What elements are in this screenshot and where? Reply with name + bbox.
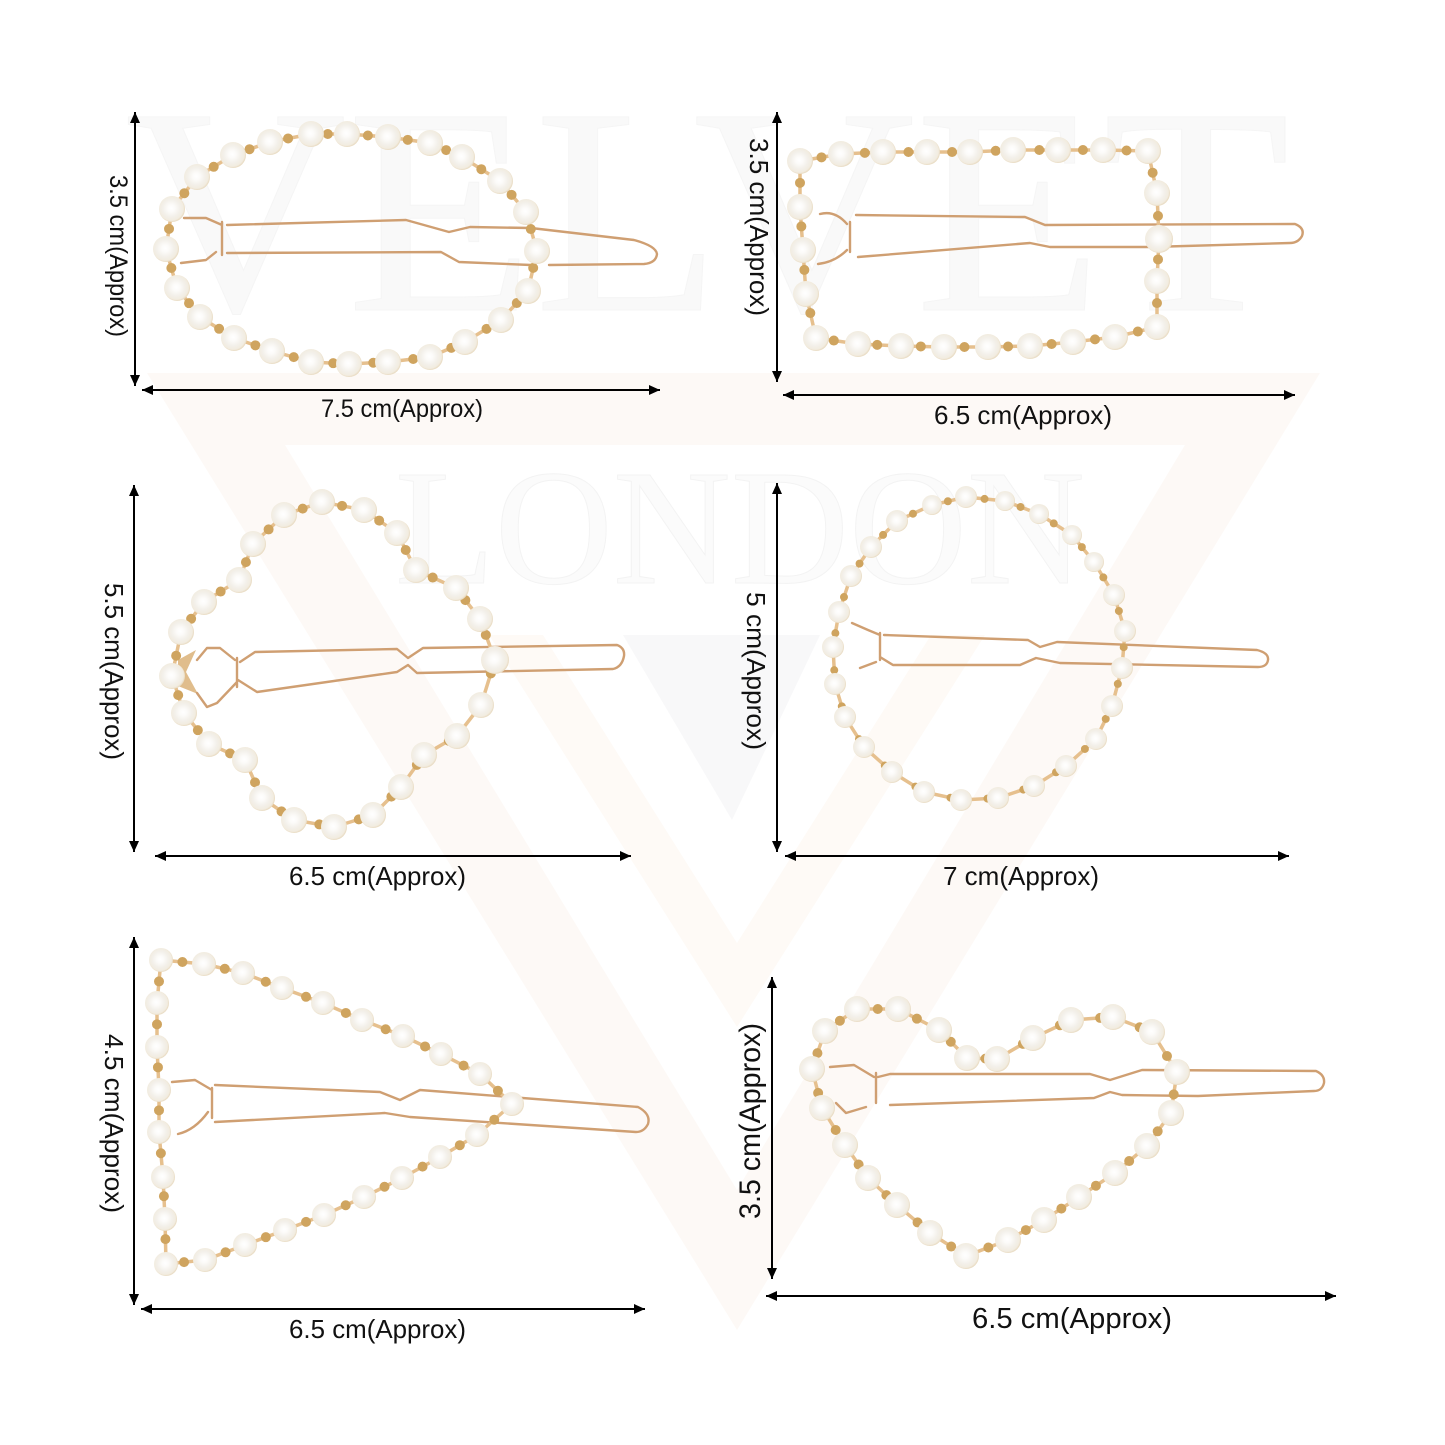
watermark: VELVET wordmark: VELVET: [125, 47, 1290, 374]
dimension: oval height: 3.5 cm(Approx): [104, 175, 132, 337]
dimension: wavy circle width: 6.5 cm(Approx): [289, 861, 466, 891]
dimension: heart width: 6.5 cm(Approx): [972, 1303, 1172, 1335]
dimension: heart height: 3.5 cm(Approx): [734, 1023, 767, 1219]
dimension: wavy circle height: 5.5 cm(Approx): [99, 583, 129, 760]
clip: wavy circle pearl hair clip: [159, 489, 624, 840]
clip: round pearl hair clip: [822, 486, 1268, 811]
clip: heart pearl hair clip: [799, 996, 1324, 1269]
dimension: rectangle height: 3.5 cm(Approx): [744, 138, 774, 316]
clip: triangle pearl hair clip: [145, 948, 649, 1276]
clip: rectangle pearl hair clip: [787, 137, 1303, 360]
dimension: triangle width: 6.5 cm(Approx): [289, 1314, 466, 1344]
dimension: round height: 5 cm(Approx): [741, 592, 771, 750]
dimension: rectangle width: 6.5 cm(Approx): [934, 400, 1112, 430]
dimension: triangle height: 4.5 cm(Approx): [99, 1034, 129, 1213]
dimension: round width: 7 cm(Approx): [943, 861, 1099, 891]
clip: oval pearl hair clip: [153, 121, 657, 377]
watermark: logo triangle: [147, 373, 1320, 1330]
dimension: oval width: 7.5 cm(Approx): [321, 395, 483, 423]
watermark: LONDON wordmark: LONDON: [395, 436, 1085, 619]
